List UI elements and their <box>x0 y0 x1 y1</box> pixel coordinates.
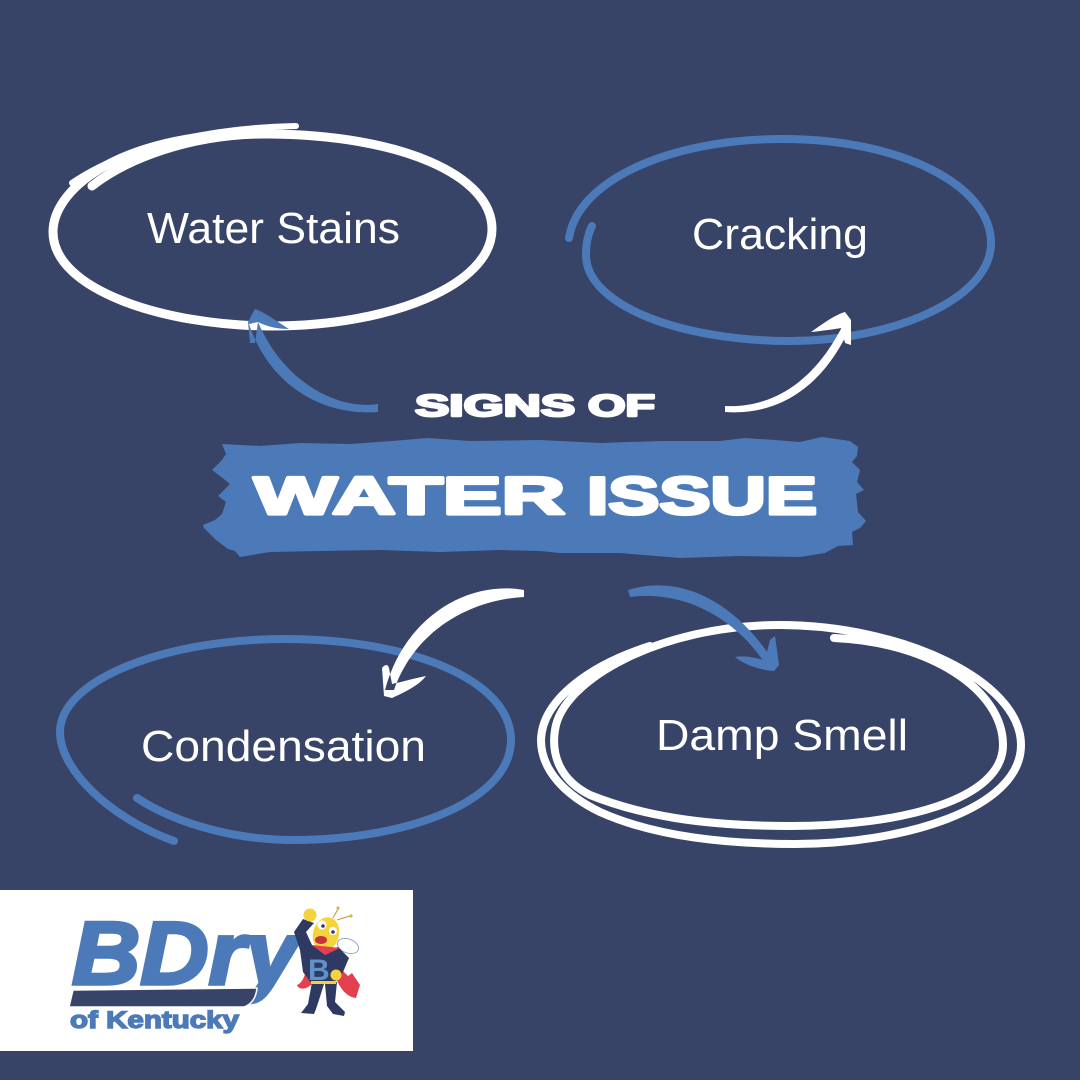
heading: Water Issue: ISSUE <box>587 467 817 526</box>
head <box>309 914 343 954</box>
antennae <box>333 909 350 920</box>
label: Water Stains: Water Stains <box>147 204 400 253</box>
heading: Water Issue <box>254 467 817 526</box>
heading: Signs of <box>415 388 655 423</box>
hand-drawn white ellipse <box>53 126 492 326</box>
legs <box>301 982 324 1014</box>
eyes <box>318 920 326 930</box>
hand-drawn white scribble ellipse <box>541 625 1021 844</box>
panel: Condensation <box>60 639 511 841</box>
cape <box>297 970 312 989</box>
arrow: to Cracking <box>725 312 851 412</box>
logo panel <box>0 890 413 1051</box>
arrow: to Damp Smell <box>628 585 779 671</box>
label: Damp Smell: Damp Smell <box>656 711 908 760</box>
collar <box>312 945 340 955</box>
logo wordmark: BDry: BDry <box>72 903 303 1003</box>
arrow: to Condensation <box>382 588 524 698</box>
brush stroke banner <box>203 437 866 558</box>
mouth <box>315 936 327 944</box>
label: Cracking: Cracking <box>692 210 868 259</box>
logo swoosh <box>69 988 257 1007</box>
torso and raised arm <box>294 919 349 984</box>
heading: Signs of: SIGNS <box>415 388 575 423</box>
heading: Signs of: OF <box>588 388 655 423</box>
chest B: B <box>308 954 330 987</box>
icon: superhero bee mascot <box>294 906 361 1016</box>
panel: Water Stains <box>53 126 492 326</box>
wings <box>335 936 361 956</box>
logo subtitle: of Kentucky: of Kentucky <box>70 1007 240 1034</box>
panel: Damp Smell <box>541 625 1021 844</box>
arrow: to Water Stains <box>248 309 378 412</box>
label: Condensation: Condensation <box>141 722 426 771</box>
hand-drawn blue ellipse <box>569 139 991 341</box>
fists <box>304 908 316 922</box>
belt <box>311 981 336 984</box>
heading: Water Issue: WATER <box>254 467 565 526</box>
panel: Cracking <box>569 139 991 341</box>
hand-drawn blue ellipse <box>60 639 511 841</box>
